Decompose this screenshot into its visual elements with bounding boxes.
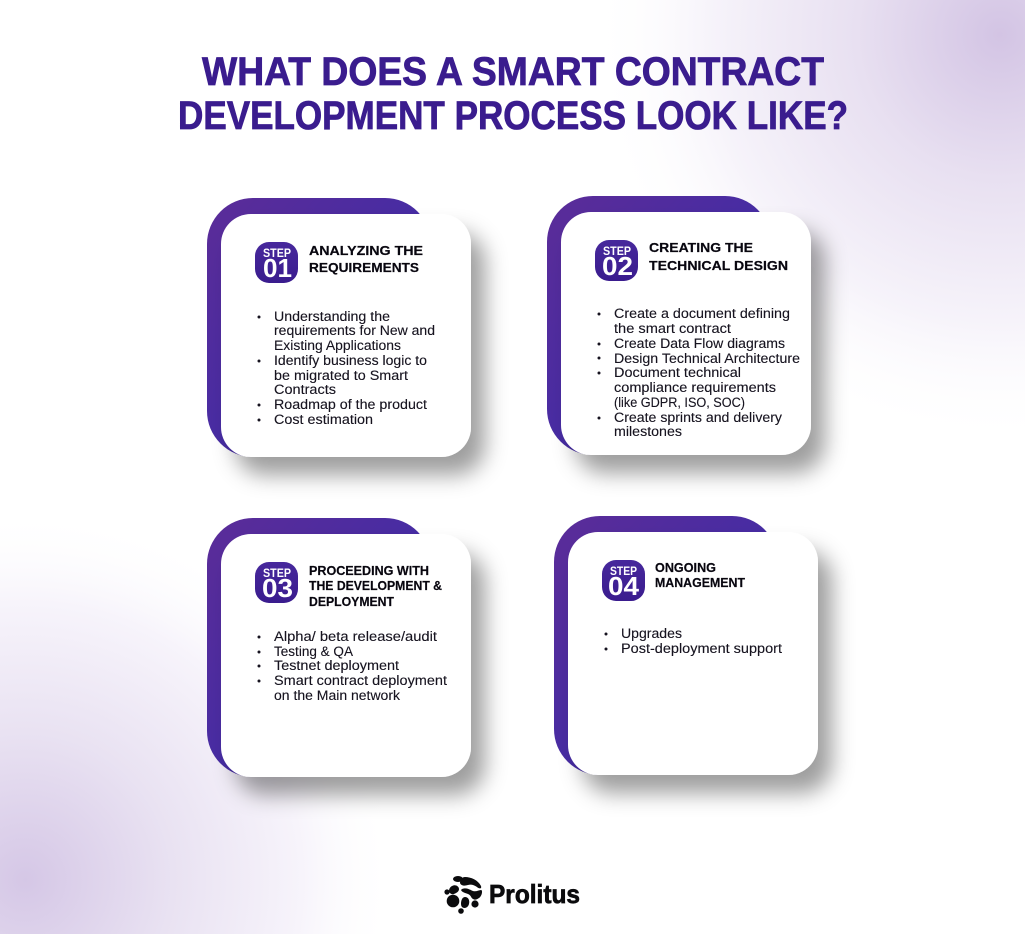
- step 2 badge: 02: [602, 251, 633, 281]
- step 4 badge: STEP: [610, 564, 637, 578]
- step 1 list: Roadmap of the product: [274, 397, 427, 412]
- step 4 heading: ONGOING: [655, 560, 716, 575]
- title: DEVELOPMENT PROCESS LOOK LIKE?: [178, 94, 848, 138]
- step 1 badge: 01: [263, 253, 292, 283]
- step 2 list: Document technical: [614, 365, 741, 380]
- step 2 list: Create sprints and delivery: [614, 410, 782, 425]
- step 1 heading: ANALYZING THE: [309, 243, 423, 258]
- step 1 list: be migrated to Smart: [274, 368, 408, 383]
- step 1 list: Contracts: [274, 382, 336, 397]
- step 2 list: Create a document defining: [614, 306, 790, 321]
- step 2 badge: [595, 240, 638, 281]
- step 1 heading: REQUIREMENTS: [309, 260, 419, 275]
- step 1 list: [258, 309, 435, 427]
- step 1 list: Understanding the: [274, 309, 390, 324]
- step 3 badge: STEP: [263, 566, 291, 580]
- icon: logo blobs: [444, 876, 482, 914]
- panel: step 4: [554, 516, 818, 775]
- step 4 badge: [602, 560, 645, 601]
- logo: Prolitus: [444, 876, 580, 914]
- step 2 list: Create Data Flow diagrams: [614, 336, 785, 351]
- title: WHAT DOES A SMART CONTRACT: [202, 50, 824, 94]
- step 3 heading: [309, 563, 442, 609]
- step 1 list: Existing Applications: [274, 338, 401, 353]
- step 2 list: milestones: [614, 424, 682, 439]
- step 2 list: [598, 306, 800, 439]
- step 2 list: compliance requirements: [614, 380, 776, 395]
- step 1 list: Cost estimation: [274, 412, 373, 427]
- step 2 heading: TECHNICAL DESIGN: [649, 258, 788, 273]
- step 4 list: Post-deployment support: [621, 641, 782, 656]
- title: [178, 50, 848, 138]
- step 1 badge: STEP: [263, 246, 291, 260]
- step 1 list: Identify business logic to: [274, 353, 427, 368]
- step 3 list: Smart contract deployment: [274, 673, 447, 688]
- step 3 heading: PROCEEDING WITH: [309, 563, 429, 578]
- step 1 list: requirements for New and: [274, 323, 435, 338]
- panel: step 1: [207, 198, 471, 457]
- step 2 heading: [649, 240, 788, 273]
- step 1 heading: [309, 243, 423, 275]
- step 3 heading: THE DEVELOPMENT &: [309, 578, 442, 593]
- step 3 badge: [255, 562, 298, 603]
- step 3 badge: 03: [262, 573, 293, 603]
- step 4 heading: [655, 560, 745, 590]
- panel: step 3: [207, 518, 471, 777]
- step 3 heading: DEPLOYMENT: [309, 594, 394, 609]
- step 1 badge: [255, 242, 298, 283]
- step 4 heading: MANAGEMENT: [655, 575, 745, 590]
- step 3 list: Testnet deployment: [274, 658, 399, 673]
- logo: Prolitus: Prolitus: [489, 879, 580, 909]
- step 4 badge: 04: [608, 571, 640, 601]
- step 2 list: Design Technical Architecture: [614, 351, 800, 366]
- step 3 list: Testing & QA: [274, 644, 353, 659]
- panel: step 2: [547, 196, 811, 455]
- step 3 list: on the Main network: [274, 688, 400, 703]
- step 3 list: Alpha/ beta release/audit: [274, 629, 437, 644]
- step 3 list: [258, 629, 447, 703]
- step 2 heading: CREATING THE: [649, 240, 753, 255]
- step 2 list: (like GDPR, ISO, SOC): [614, 395, 745, 410]
- step 2 list: the smart contract: [614, 321, 731, 336]
- step 4 list: Upgrades: [621, 626, 682, 641]
- step 2 badge: STEP: [603, 244, 631, 258]
- step 4 list: [604, 626, 782, 656]
